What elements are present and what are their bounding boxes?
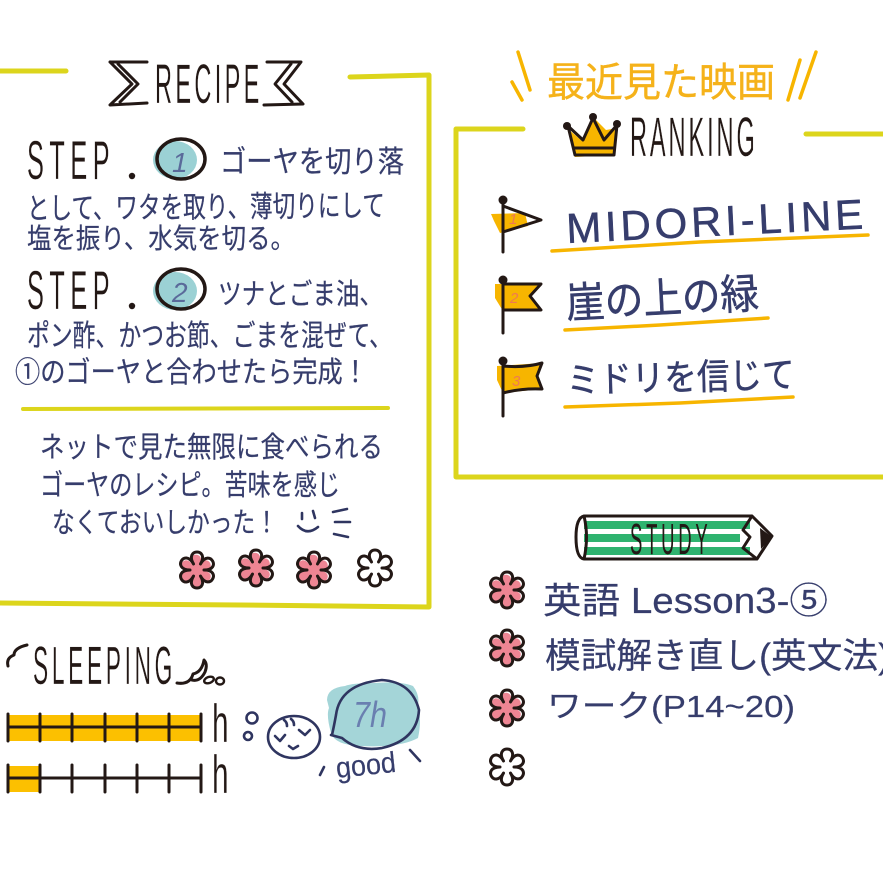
step 1 xyxy=(27,130,404,254)
recipe comment: なくておいしかった！ xyxy=(52,507,278,538)
recipe heading xyxy=(110,53,303,116)
rank 3: 3 xyxy=(512,373,521,390)
step 1: STEP xyxy=(27,130,115,192)
step 1: 塩を振り、水気を切る。 xyxy=(27,223,295,254)
step 2: 2 xyxy=(171,277,188,308)
recipe frame xyxy=(0,71,429,607)
panel: sleeping xyxy=(8,636,420,805)
rating flowers xyxy=(181,550,391,588)
panel: movie ranking xyxy=(456,52,883,477)
callout: 7h good xyxy=(320,680,420,785)
sleep bar: second row: h xyxy=(212,746,229,805)
callout: 7h good: 7h xyxy=(353,696,387,736)
rank 1: 1 xyxy=(509,211,517,228)
step 1: 1 xyxy=(172,147,188,178)
ranking heading: RANKING xyxy=(630,106,758,169)
panel: study xyxy=(491,515,883,785)
sleep bar: first row: h xyxy=(212,695,229,754)
sleep bar: first row xyxy=(8,695,229,754)
icon: crown xyxy=(563,113,621,157)
step 2: ①のゴーヤと合わせたら完成！ xyxy=(15,356,368,389)
rank 1: MIDORI-LINE xyxy=(565,191,864,252)
decorative heading: recently watched movies: 最近見た映画 xyxy=(547,61,775,105)
rank 2 xyxy=(495,270,768,333)
icon: smile xyxy=(298,509,350,537)
step 1: ゴーヤを切り落 xyxy=(220,146,404,179)
recipe comment: ネットで見た無限に食べられる xyxy=(40,431,383,464)
ranking frame xyxy=(456,129,883,477)
rank 2: 崖の上の緑 xyxy=(565,270,760,327)
panel: recipe xyxy=(0,53,429,607)
rank 2: 2 xyxy=(509,290,519,307)
recipe heading: RECIPE xyxy=(155,53,263,116)
icon: sleeping face xyxy=(268,716,320,758)
rank 3 xyxy=(497,354,795,416)
recipe comment xyxy=(40,431,383,538)
task 3 xyxy=(491,689,795,726)
sleeping heading xyxy=(8,636,224,696)
step 2: ツナとごま油、 xyxy=(218,278,383,311)
step 2 xyxy=(15,260,392,389)
callout: 7h good: good xyxy=(334,747,397,785)
icon: pencil heading: STUDY xyxy=(630,515,712,564)
step 2: STEP xyxy=(27,260,115,322)
task 2: 模試解き直し(英文法) xyxy=(545,637,883,676)
task 1: 英語 Lesson3-⑤ xyxy=(543,580,828,621)
rank 3: ミドリを信じて xyxy=(566,354,795,401)
decorative heading: recently watched movies xyxy=(512,52,816,105)
task 1 xyxy=(491,572,828,621)
icon: thought dots xyxy=(244,712,258,740)
step 1: として、ワタを取り、薄切りにして xyxy=(27,190,385,226)
icon: pencil heading xyxy=(576,515,772,564)
task 4: empty flower xyxy=(491,749,523,785)
step 2: ポン酢、かつお節、ごまを混ぜて、 xyxy=(27,320,392,353)
task 3: ワーク(P14~20) xyxy=(547,689,795,724)
sleep bar: second row xyxy=(8,746,229,805)
sleeping heading: SLEEPING xyxy=(33,636,176,696)
recipe comment: ゴーヤのレシピ。苦味を感じ xyxy=(40,469,340,502)
